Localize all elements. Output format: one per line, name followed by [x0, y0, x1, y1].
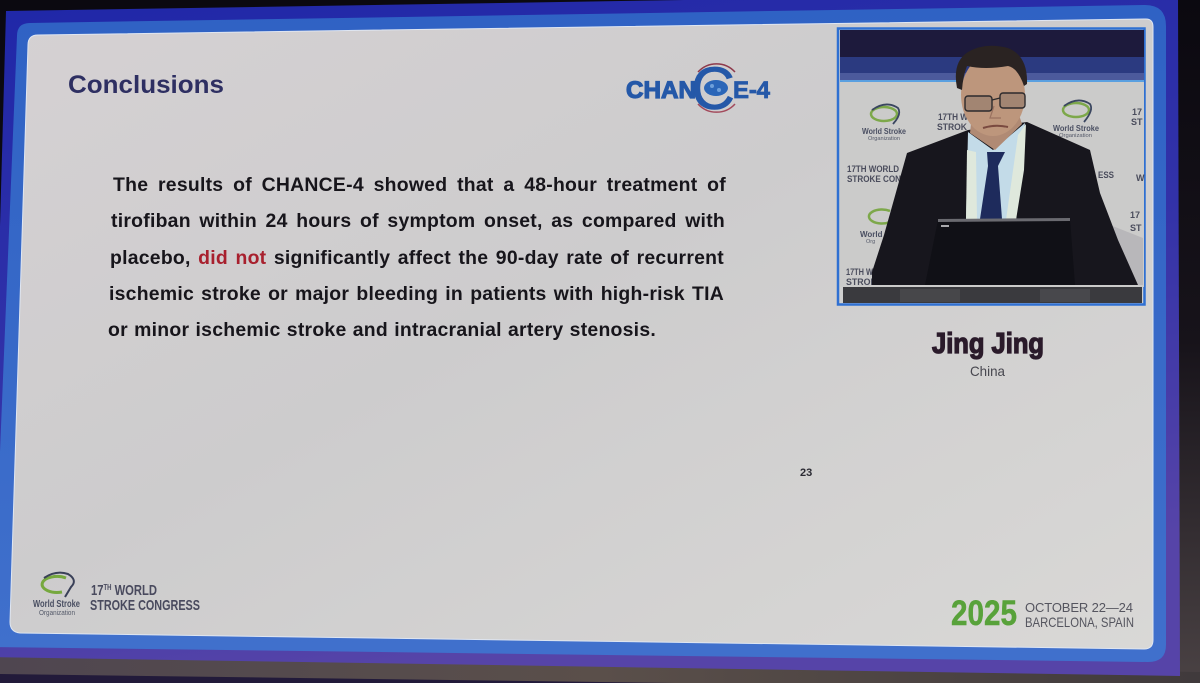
backdrop congress wordmarks: 17TH W	[846, 267, 873, 277]
speaker name: Jing Jing	[932, 328, 1044, 360]
backdrop congress wordmarks: 17	[1130, 210, 1140, 220]
footer: congress name: WORLD	[111, 582, 157, 599]
speaker video frame	[838, 28, 1145, 304]
backdrop logo 1: Organization	[868, 136, 900, 142]
backdrop logo 2	[1053, 100, 1100, 139]
backdrop logo 2: Organization	[1059, 133, 1092, 139]
backdrop logo 1	[862, 104, 906, 142]
face	[961, 54, 1025, 136]
nose	[990, 106, 1001, 118]
logo: CHANCE-4: CHAN	[626, 77, 696, 104]
title: Conclusions	[68, 71, 224, 99]
stage ceiling	[840, 30, 1144, 57]
backdrop congress wordmarks: STROI	[846, 277, 873, 287]
footer logo: World Stroke Organization: Organization	[39, 610, 75, 617]
footer: congress name: 17	[91, 582, 108, 599]
glasses	[965, 93, 1025, 111]
conclusion text block: The results of CHANCE-4 showed that a 48-hour treatment of	[113, 174, 726, 196]
logo: CHANCE-4	[626, 55, 771, 122]
footer: year: 2025	[951, 594, 1017, 633]
backdrop logo 3: World	[860, 230, 883, 239]
backdrop logo 3	[860, 210, 890, 245]
conclusion text block: ischemic stroke or major bleeding in patients with high-risk TIA	[109, 283, 724, 305]
footer: congress name: TH	[103, 583, 112, 592]
logo: CHANCE-4: E-4	[733, 77, 771, 104]
tie	[980, 152, 1005, 219]
slide number: 23	[800, 467, 812, 479]
neck	[970, 112, 1022, 150]
backdrop congress wordmarks: NG	[1076, 275, 1090, 285]
speaker country: China	[970, 363, 1005, 379]
backdrop congress wordmarks: 17TH WORLD	[847, 164, 899, 174]
suit	[872, 122, 1138, 285]
backdrop congress wordmarks: W	[1136, 173, 1145, 183]
backdrop congress wordmarks: STROKE CON	[847, 174, 901, 184]
backdrop congress wordmarks: 17TH W	[938, 112, 968, 122]
backdrop congress wordmarks: ESS	[1098, 170, 1114, 180]
backdrop congress wordmarks: RE	[908, 277, 921, 287]
backdrop congress wordmarks: STROK	[937, 122, 967, 132]
laptop	[925, 218, 1075, 285]
speaker	[872, 46, 1138, 285]
backdrop logo 3: Org	[866, 239, 875, 245]
footer: date and place: BARCELONA, SPAIN	[1025, 614, 1134, 630]
backdrop congress wordmarks: 17	[1132, 107, 1142, 117]
backdrop congress wordmarks	[846, 107, 1145, 287]
conclusion text block: placebo, did not significantly affect the 90-day rate of recurrent	[110, 247, 724, 269]
backdrop congress wordmarks: ST	[1131, 117, 1143, 127]
lanyard left	[966, 150, 977, 220]
backdrop logo 2: World Stroke	[1053, 124, 1100, 133]
backdrop logo 1: World Stroke	[862, 127, 906, 136]
footer logo: World Stroke Organization: World Stroke	[33, 599, 80, 610]
lanyard right	[1006, 124, 1026, 220]
conclusion text block	[108, 174, 726, 341]
footer: congress name	[90, 582, 200, 614]
footer: date and place	[1025, 600, 1134, 630]
footer: congress name: STROKE CONGRESS	[90, 597, 200, 614]
backdrop	[840, 82, 1144, 287]
blue stage band	[840, 57, 1144, 75]
conclusion text block: tirofiban within 24 hours of symptom onset, as compared with	[111, 210, 725, 232]
mouth	[983, 126, 1008, 128]
logo: CHANCE-4: C	[691, 55, 735, 122]
hair	[956, 46, 1027, 90]
footer logo: World Stroke Organization	[33, 573, 80, 617]
shirt	[966, 123, 1025, 220]
conclusion text block: or minor ischemic stroke and intracranial artery stenosis.	[108, 319, 656, 341]
backdrop congress wordmarks: ST	[1130, 223, 1142, 233]
lectern	[843, 287, 1142, 303]
footer: date and place: OCTOBER 22—24	[1025, 600, 1133, 615]
